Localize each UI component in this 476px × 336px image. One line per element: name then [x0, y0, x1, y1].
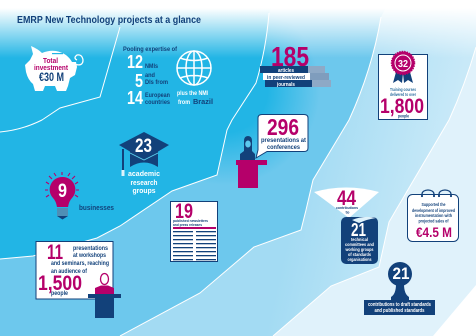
icon: graduation cap with 23: [119, 132, 169, 176]
icon: stacked books with 185 articles: journals: [276, 82, 295, 88]
panel: 11 presentations at workshops: an audience of: [51, 269, 88, 275]
icon: light bulb with 9: [45, 172, 79, 220]
title: EMRP New Technology projects at a glance: [17, 14, 201, 26]
text: pooling expertise: 5: [135, 71, 143, 91]
panel: training courses: [378, 52, 428, 120]
icon: piggy bank with total investment: Total: [43, 56, 58, 65]
panel: training courses: 1,800: [380, 95, 424, 118]
icon: stamp with 21 contributions: 21: [392, 264, 410, 283]
panel: calendar, instrumentation sales: Supported the: [422, 202, 446, 207]
panel: calendar, instrumentation sales: development of improved: [412, 208, 455, 213]
text: academic research groups: groups: [132, 186, 156, 195]
icon: speaker at pink podium: [236, 136, 267, 188]
panel: 21 technical committees: working groups: [345, 247, 374, 253]
panel: 11 presentations at workshops: at workshops: [73, 253, 107, 259]
icon: piggy bank with total investment: investment: [34, 63, 68, 72]
text: academic research groups: [128, 169, 160, 195]
text: pooling expertise: [123, 46, 178, 108]
panel: training courses: delivered to over: [390, 92, 416, 97]
icon: globe: [177, 51, 211, 85]
icon: funnel with 44 contributions: 44: [337, 187, 356, 210]
panel: 19 newsletters document: [170, 200, 218, 262]
panel: calendar, instrumentation sales: projected sales of: [418, 218, 449, 224]
icon: stacked books with 185 articles: 185: [271, 41, 309, 72]
panel: 11 presentations at workshops: people: [51, 291, 69, 297]
callout: 296 presentations at conferences: [256, 114, 308, 158]
icon: stamp with 21 contributions: and published standards: [374, 308, 425, 314]
panel: 19 newsletters document: and press releases: [173, 223, 202, 227]
icon: stamp with 21 contributions: contributions to draft standards: [368, 302, 431, 308]
panel: 21 technical committees: [341, 217, 378, 264]
callout: 296 presentations at conferences: 296: [267, 114, 299, 140]
panel: 21 technical committees: of standards: [348, 252, 371, 258]
panel: 11 presentations at workshops: 11: [47, 241, 63, 264]
panel: 21 technical committees: committees and: [345, 242, 374, 248]
panel: calendar, instrumentation sales: €4.5 M: [416, 224, 452, 240]
text: pooling expertise: and: [145, 72, 155, 79]
panel: 21 technical committees: 21: [351, 220, 366, 240]
panel: 19 newsletters document: published newsletters: [173, 219, 208, 223]
panel: calendar, instrumentation sales: [408, 190, 458, 242]
text: plus the NMI from Brazil: plus the NMI: [177, 90, 208, 97]
icon: stamp with 21 contributions: [364, 262, 435, 315]
text: academic research groups: academic: [128, 169, 160, 178]
text: businesses: businesses: [79, 203, 114, 212]
text: pooling expertise: European: [145, 92, 170, 99]
text: pooling expertise: Pooling expertise of: [123, 46, 178, 53]
panel: 21 technical committees: technical: [351, 237, 368, 243]
icon: light bulb with 9: 9: [58, 181, 67, 202]
icon: piggy bank with total investment: €30 M: [39, 70, 64, 84]
panel: 11 presentations at workshops: 1,500: [38, 272, 82, 295]
panel: training courses: people: [398, 114, 409, 118]
panel: training courses: 32: [398, 58, 408, 70]
text: academic research groups: research: [130, 178, 158, 187]
callout: 296 presentations at conferences: conferences: [267, 144, 300, 151]
text: plus the NMI from Brazil: Brazil: [193, 97, 213, 106]
text: pooling expertise: 14: [127, 88, 143, 108]
panel: calendar, instrumentation sales: instrumentation with: [415, 213, 452, 218]
text: pooling expertise: 12: [127, 52, 143, 72]
text: pooling expertise: DIs from: [145, 79, 168, 86]
icon: stacked books with 185 articles: in peer-reviewed: [267, 75, 305, 81]
callout: 296 presentations at conferences: presentations at: [261, 137, 307, 144]
text: plus the NMI from Brazil: from: [178, 99, 190, 106]
panel: 11 presentations at workshops: [36, 241, 121, 318]
panel: 19 newsletters document: 19: [175, 200, 193, 223]
panel: 11 presentations at workshops: presentations: [73, 246, 109, 252]
panel: 11 presentations at workshops: and seminars, reaching: [51, 261, 109, 267]
text: plus the NMI from Brazil: [177, 90, 213, 106]
icon: graduation cap with 23: 23: [135, 136, 152, 157]
icon: stacked books with 185 articles: [260, 41, 331, 88]
icon: stacked books with 185 articles: articles: [278, 68, 294, 74]
icon: funnel with 44 contributions: contributions: [336, 206, 358, 210]
text: pooling expertise: NMIs: [145, 63, 158, 70]
text: pooling expertise: countries: [145, 99, 170, 106]
icon: funnel with 44 contributions: [314, 187, 379, 218]
icon: piggy bank with total investment: [25, 46, 83, 91]
panel: training courses: Training courses: [390, 87, 416, 92]
panel: 21 technical committees: organisations: [348, 257, 372, 263]
icon: funnel with 44 contributions: to: [346, 210, 350, 214]
